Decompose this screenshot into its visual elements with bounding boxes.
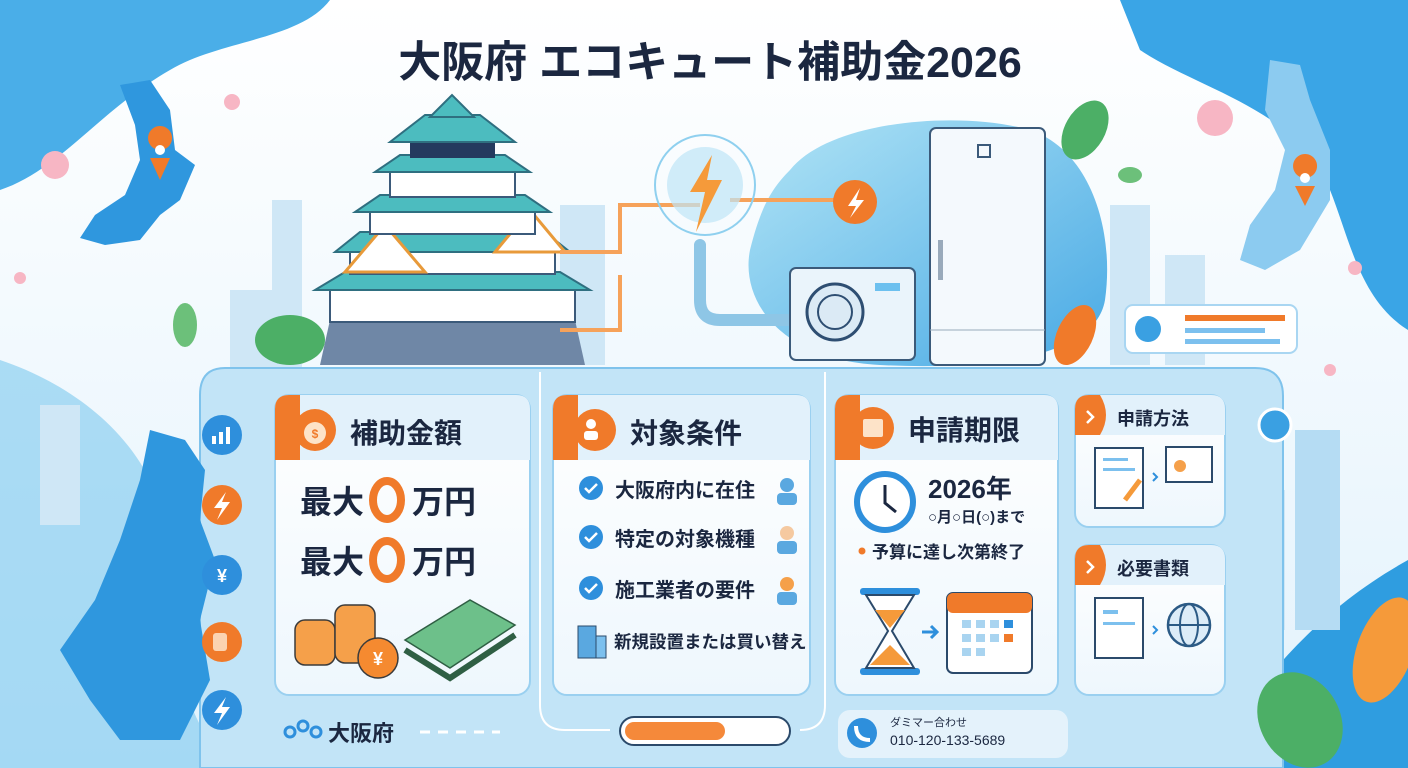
icon: coins and cash: ¥ <box>373 649 383 669</box>
panel: 対象条件 <box>553 395 810 695</box>
title: 大阪府 エコキュート補助金2026 <box>398 39 1022 87</box>
icon: chart <box>202 415 242 455</box>
deadline text: ○月○日(○)まで <box>928 509 1025 526</box>
logo: 大阪府: 大阪府 <box>328 721 394 746</box>
main panel <box>200 368 1283 768</box>
flow connector lines <box>540 372 825 730</box>
icon: lightning orange <box>202 485 242 525</box>
contact box: ダミマー合わせ <box>890 715 967 729</box>
contact box <box>838 710 1068 758</box>
icon: bush leaves left <box>173 303 325 365</box>
panel: 申請方法: 申請方法 <box>1117 408 1189 429</box>
illustration: hot water tank <box>930 128 1045 365</box>
panel: 申請期限 <box>835 395 1058 695</box>
panel: 申請期限: 申請期限 <box>908 415 1020 446</box>
amount lines: 最大 <box>300 544 364 580</box>
icon: document to globe <box>1095 598 1210 658</box>
icon: sakura flowers <box>14 94 1362 376</box>
icon: Osaka map right <box>1240 60 1330 270</box>
illustration: heat pump unit <box>790 268 915 360</box>
deadline text: 2026年 <box>928 474 1012 504</box>
icon: hourglass to calendar <box>860 588 1032 675</box>
icon: location pin right <box>1293 154 1317 206</box>
icon: yen <box>202 555 242 595</box>
budget note: 予算に達し次第終了 <box>872 542 1025 562</box>
small dashboard card <box>1125 305 1297 353</box>
icon: money bag <box>294 409 336 451</box>
panel: 補助金額 <box>275 395 530 695</box>
icon: lightning blue <box>202 690 242 730</box>
heading: 補助金額 <box>350 418 462 449</box>
panel: 必要書類 <box>1075 545 1225 695</box>
city background <box>40 200 1340 630</box>
condition list: 特定の対象機種 <box>615 527 755 551</box>
condition list: 新規設置または買い替え <box>614 632 806 652</box>
icon: coins <box>202 622 242 662</box>
icon: form to web <box>1095 447 1212 508</box>
panel: 対象条件: 対象条件 <box>630 418 742 449</box>
progress bar <box>620 717 790 745</box>
panel: 申請方法 <box>1075 395 1225 527</box>
icon: coins and cash <box>295 600 515 678</box>
amount lines: 万円 <box>412 544 476 580</box>
blue blob behind equipment <box>749 120 1107 366</box>
icon: lightning circle <box>655 135 755 235</box>
condition list: 大阪府内に在住 <box>615 479 755 502</box>
condition list <box>578 476 806 658</box>
icon: clock <box>857 474 913 530</box>
icon: Osaka map left <box>80 80 195 245</box>
orange energy lines <box>560 200 835 330</box>
amount lines: 最大 <box>300 484 364 520</box>
big blue map left <box>60 430 215 740</box>
icon: yen: ¥ <box>217 566 227 586</box>
illustration: Osaka castle <box>315 95 590 365</box>
pipe <box>700 245 790 320</box>
icon: location pin left <box>148 126 172 180</box>
icon: circle badge right <box>1259 409 1291 441</box>
amount lines: 万円 <box>412 484 476 520</box>
icon: leaves right <box>1045 92 1142 372</box>
icon: orange energy circle <box>833 180 877 224</box>
icon: money bag: $ <box>312 427 319 441</box>
icon: big leaves bottom right <box>1240 589 1408 768</box>
deadline text <box>928 474 1025 526</box>
logo: 大阪府 <box>285 721 500 746</box>
icon: person check <box>574 409 616 451</box>
left icon column <box>202 415 242 730</box>
condition list: 施工業者の要件 <box>615 579 755 602</box>
amount lines <box>300 481 476 580</box>
icon: calendar <box>852 407 894 449</box>
panel: 必要書類: 必要書類 <box>1117 558 1189 579</box>
contact box: 010-120-133-5689 <box>890 732 1005 748</box>
